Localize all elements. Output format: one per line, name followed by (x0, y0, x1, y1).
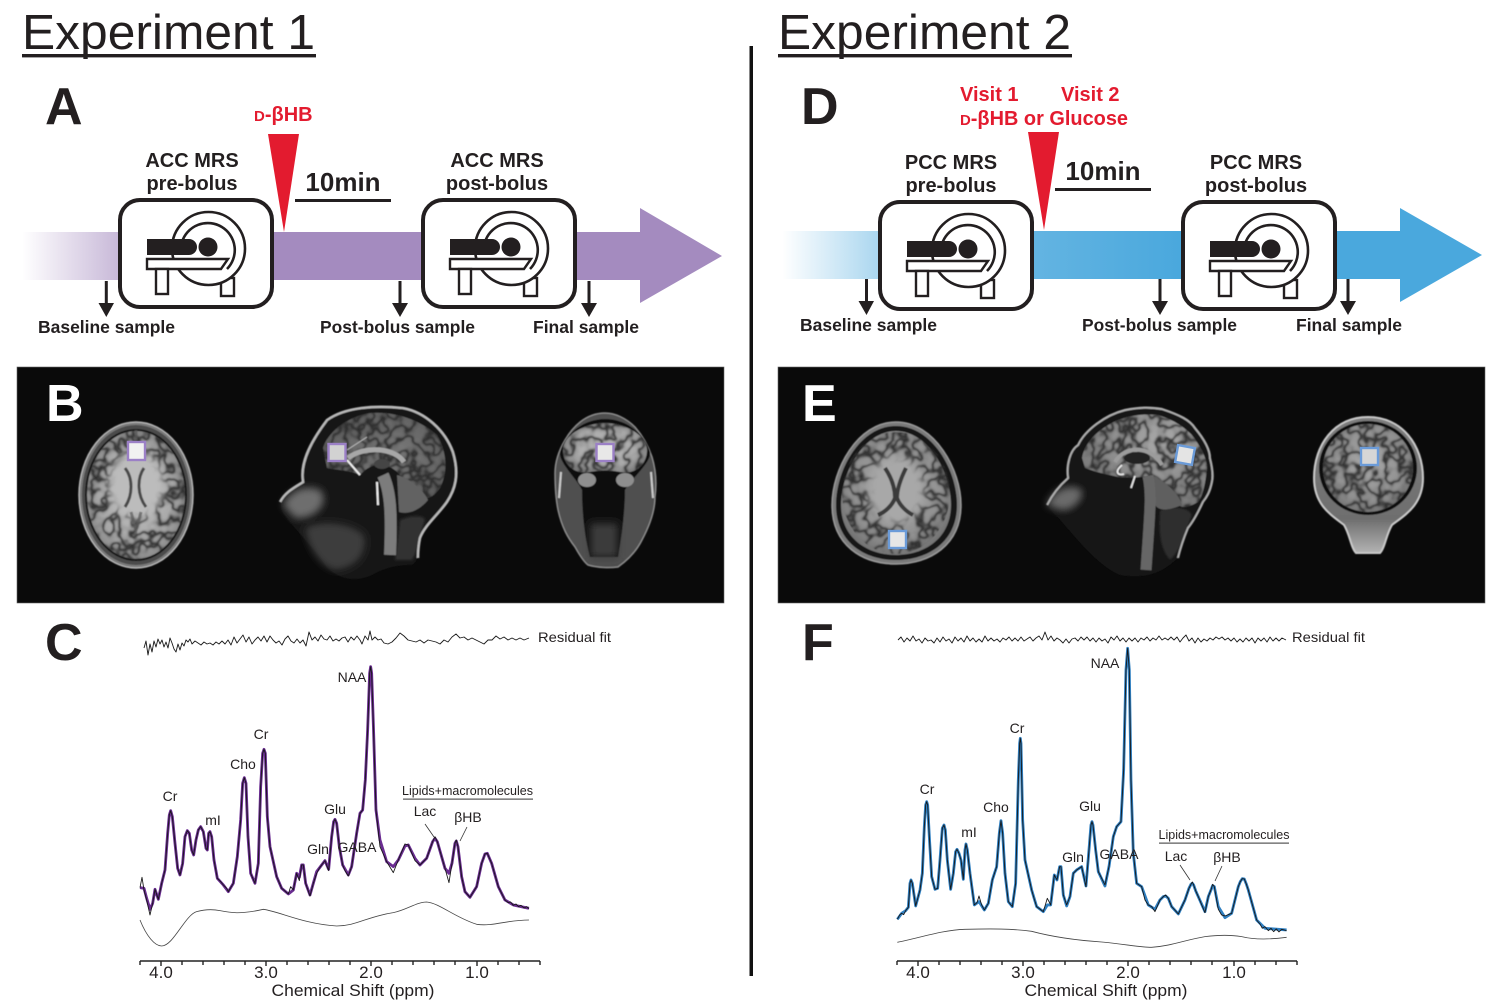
panel: experiment 1 (22, 6, 722, 337)
peak labels: Lac (1165, 848, 1187, 864)
label: residual fit: Residual fit (1292, 629, 1365, 645)
label: residual fit: Residual fit (538, 629, 611, 645)
panel label F: F (802, 614, 834, 672)
peak labels: GABA (1100, 846, 1139, 862)
voxel: coronal (596, 444, 614, 461)
arrow: final sample (1340, 279, 1356, 315)
visit labels: Visit 1 (960, 84, 1019, 106)
peak labels: Lac (414, 803, 436, 819)
title: Experiment 2: Experiment 2 (778, 6, 1071, 60)
MRI axial slice (832, 422, 961, 564)
label: PCC MRS pre-bolus (905, 152, 997, 197)
label: post-bolus sample: Post-bolus sample (1082, 315, 1237, 335)
label: ACC MRS pre-bolus: pre-bolus (146, 173, 238, 195)
x axis: 2.0 (359, 963, 383, 982)
10 minute scale (295, 167, 391, 202)
MRI axial slice (79, 422, 193, 568)
peak labels: βHB (454, 809, 482, 825)
10 minute scale (1055, 156, 1151, 191)
arrow: post-bolus sample (1152, 279, 1168, 315)
peak labels: Gln (307, 841, 329, 857)
panel label C: C (45, 614, 83, 672)
label: PCC MRS pre-bolus: PCC MRS (905, 152, 997, 174)
panel label B: B (46, 375, 84, 433)
peak labels: mI (205, 812, 221, 828)
label: ACC MRS post-bolus (446, 150, 548, 195)
bracket: lipids and macromolecules: Lipids+macromolecules (402, 784, 533, 798)
panel label D: D (801, 78, 839, 136)
voxel: coronal (1361, 448, 1378, 465)
label: baseline sample: Baseline sample (800, 315, 937, 335)
measured spectrum, black (897, 648, 1287, 932)
label: PCC MRS post-bolus: PCC MRS (1210, 152, 1302, 174)
baseline curve (140, 902, 529, 946)
label: ACC MRS post-bolus: ACC MRS (450, 150, 544, 172)
x axis: 3.0 (254, 963, 278, 982)
bracket: lipids and macromolecules: Lipids+macromolecules (1159, 828, 1289, 842)
icon: scanner pre-bolus (880, 202, 1032, 309)
x axis (897, 961, 1297, 1000)
x axis: 2.0 (1116, 963, 1140, 982)
voxel: sagittal (1175, 445, 1195, 465)
voxel: axial (889, 531, 906, 548)
icon: scanner post-bolus (1183, 202, 1335, 309)
voxel: axial (128, 442, 145, 460)
residual fit trace (898, 632, 1286, 643)
visit labels (960, 84, 1128, 130)
bolus label: D-βHB (254, 104, 313, 126)
x axis: 1.0 (1222, 963, 1246, 982)
peak labels (920, 655, 1241, 881)
fitted spectrum, blue (897, 648, 1287, 930)
panel E: MRI images (778, 367, 1485, 603)
label: PCC MRS post-bolus (1205, 152, 1307, 197)
arrow: baseline sample (858, 279, 874, 315)
peak labels (163, 669, 482, 857)
peak labels: Glu (324, 801, 346, 817)
peak labels: Cr (254, 726, 269, 742)
label: PCC MRS pre-bolus: pre-bolus (905, 175, 997, 197)
arrow: final sample (581, 281, 597, 317)
label: ACC MRS pre-bolus: ACC MRS (145, 150, 239, 172)
peak labels: Cr (920, 781, 935, 797)
timeline arrow, purple (22, 208, 722, 303)
timeline arrow, blue (782, 208, 1482, 302)
visit labels: Visit 2 (1061, 84, 1120, 106)
label: ACC MRS pre-bolus (145, 150, 239, 195)
peak labels: Cr (163, 788, 178, 804)
title: Experiment 1: Experiment 1 (22, 6, 315, 60)
x axis: 4.0 (149, 963, 173, 982)
divider (750, 46, 753, 976)
peak labels: Cr (1010, 720, 1025, 736)
peak labels: Cho (983, 799, 1009, 815)
arrow: post-bolus sample (392, 281, 408, 317)
peak labels: NAA (1091, 655, 1120, 671)
MRI sagittal slice (280, 406, 456, 579)
MRI sagittal slice (1047, 408, 1213, 576)
x axis: Chemical Shift (ppm) (272, 981, 434, 1000)
peak labels: βHB (1213, 849, 1241, 865)
panel label A: A (45, 78, 83, 136)
10 minute scale: 10min (1065, 156, 1141, 186)
label: final sample: Final sample (533, 317, 639, 337)
label: post-bolus sample: Post-bolus sample (320, 317, 475, 337)
panel F: spectrum (802, 614, 1365, 1000)
x axis: 1.0 (465, 963, 489, 982)
icon: scanner pre-bolus (120, 200, 272, 307)
bolus triangle (268, 134, 299, 232)
arrow: baseline sample (98, 281, 114, 317)
10 minute scale: 10min (305, 167, 381, 197)
x axis: 4.0 (906, 963, 930, 982)
visit labels: D-βHB or Glucose (960, 108, 1128, 130)
measured spectrum, black (140, 667, 529, 915)
bolus triangle (1028, 132, 1059, 230)
residual fit trace (144, 631, 529, 655)
peak labels: Gln (1062, 849, 1084, 865)
x axis: 3.0 (1011, 963, 1035, 982)
x axis (140, 961, 540, 1000)
MRI coronal slice (1314, 417, 1423, 553)
peak labels: GABA (338, 839, 377, 855)
label: baseline sample: Baseline sample (38, 317, 175, 337)
peak labels: Cho (230, 756, 256, 772)
peak labels: Glu (1079, 798, 1101, 814)
x axis: Chemical Shift (ppm) (1024, 981, 1188, 1000)
label: final sample: Final sample (1296, 315, 1402, 335)
peak labels: mI (961, 824, 977, 840)
label: ACC MRS post-bolus: post-bolus (446, 173, 548, 195)
panel label E: E (802, 375, 837, 433)
panel: experiment 2 (778, 6, 1482, 335)
panel C: spectrum (45, 614, 611, 1000)
MRI coronal slice (555, 413, 656, 568)
icon: scanner post-bolus (423, 200, 575, 307)
fitted spectrum, purple (140, 667, 529, 909)
panel B: MRI images (17, 367, 724, 603)
peak labels: NAA (338, 669, 367, 685)
label: PCC MRS post-bolus: post-bolus (1205, 175, 1307, 197)
baseline curve (897, 929, 1287, 947)
voxel: sagittal (328, 444, 346, 461)
